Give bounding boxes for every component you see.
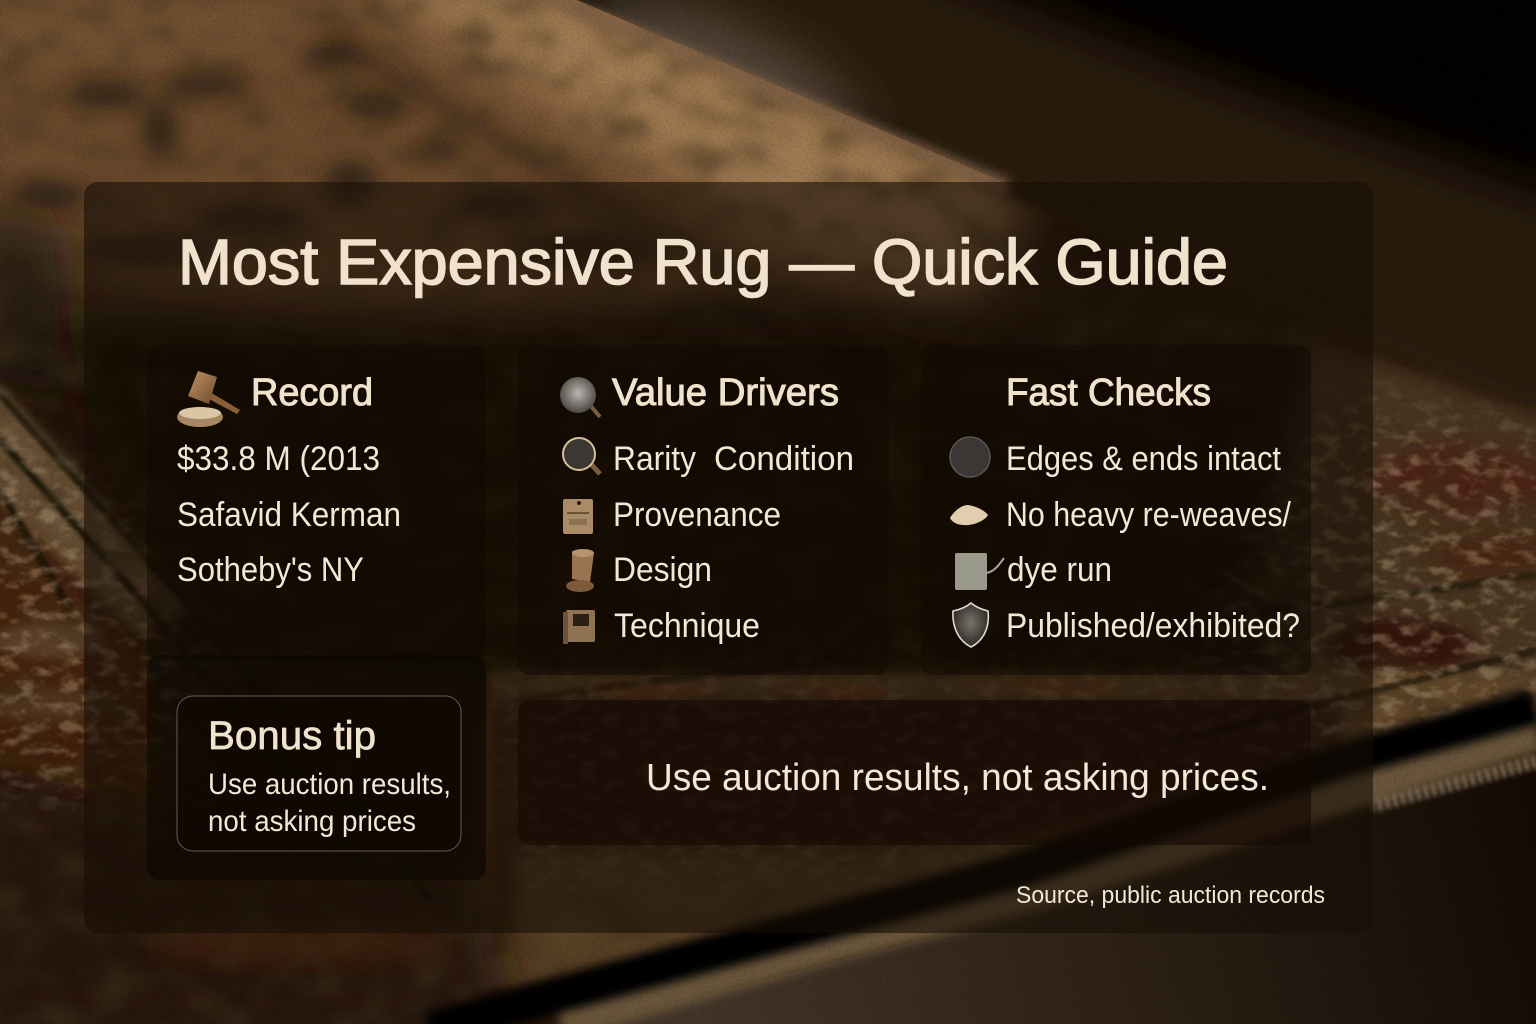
text: tip line one: Use auction results, [208, 768, 451, 801]
text: technique: Technique [614, 607, 760, 645]
text: condition: Condition [714, 440, 854, 478]
icon: shield [953, 603, 988, 647]
main translucent panel [84, 182, 1373, 933]
icon: technique loom [563, 610, 595, 644]
text: rarity: Rarity [613, 440, 696, 478]
heading: record: Record [251, 372, 373, 414]
lower band of the rug [440, 672, 1536, 1000]
icon: dark circle [950, 437, 990, 477]
panel: record [147, 345, 486, 660]
text: auction house: Sotheby's NY [177, 551, 364, 589]
text: dye run: dye run [1007, 551, 1112, 589]
heading: bonus tip: Bonus tip [208, 714, 376, 758]
source note: Source, public auction records [1016, 882, 1325, 909]
icon: cream swatch [950, 505, 988, 525]
upper-right patterned field [1266, 347, 1536, 675]
icon: gavel [177, 371, 240, 427]
dark medallion motifs [12, 43, 780, 338]
panel: fast checks [921, 345, 1311, 675]
text: re-weaves: No heavy re-weaves/ [1006, 496, 1291, 534]
text: tip line two: not asking prices [208, 805, 416, 838]
title: Most Expensive Rug — Quick Guide [178, 226, 1228, 298]
icon: provenance document [563, 499, 593, 534]
text: provenance: Provenance [613, 496, 781, 534]
icon: magnifier grey [560, 377, 600, 417]
icon: dye cup [955, 553, 1004, 590]
heading: value drivers: Value Drivers [612, 372, 839, 414]
panel: bonus tip [147, 655, 486, 880]
panel: value drivers [518, 345, 889, 675]
text: design: Design [613, 551, 712, 589]
text: published: Published/exhibited? [1006, 607, 1300, 645]
soften rug edge against floor [540, 0, 1010, 188]
panel: takeaway banner [518, 700, 1311, 845]
bonus tip card [177, 696, 461, 851]
icon: design spool [566, 549, 594, 592]
left border bands [0, 385, 190, 640]
heading: fast checks: Fast Checks [1006, 372, 1211, 414]
text: price: $33.8 M (2013 [177, 440, 380, 478]
icon: magnifier rarity [563, 438, 600, 474]
text: rug type: Safavid Kerman [177, 496, 401, 534]
text: takeaway: Use auction results, not asking prices. [646, 757, 1269, 799]
text: edges: Edges & ends intact [1006, 440, 1281, 478]
